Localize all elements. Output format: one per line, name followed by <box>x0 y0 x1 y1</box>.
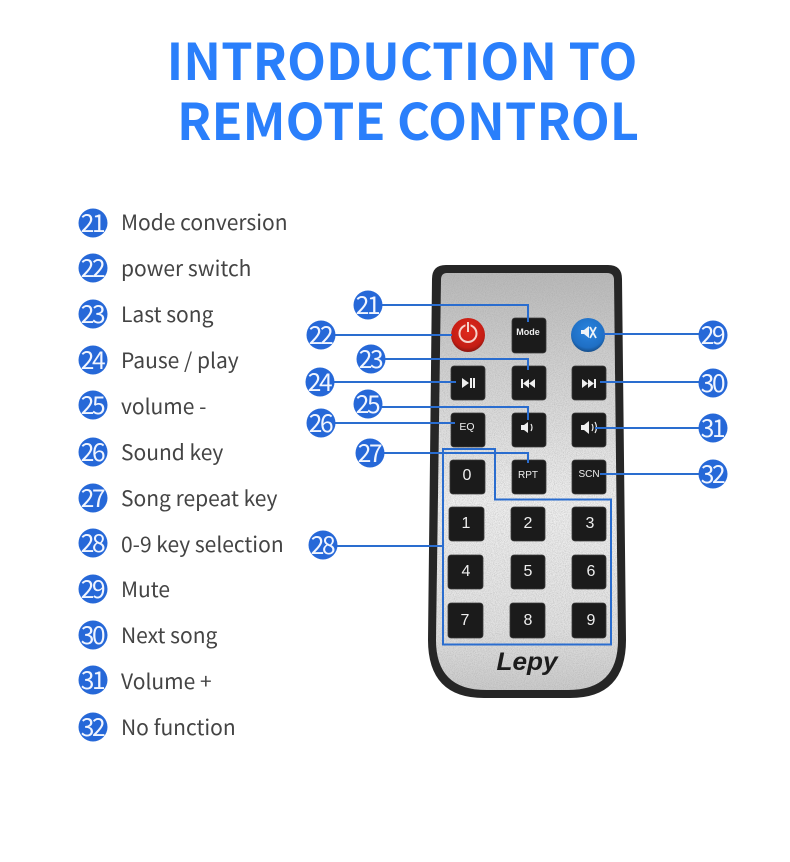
legend item 21: 21 <box>81 205 104 240</box>
callout 26: 26 <box>309 405 333 440</box>
RPT button <box>512 460 546 494</box>
callout 27: 27 <box>358 435 382 470</box>
legend item 31 <box>78 662 212 697</box>
legend item 27: 27 <box>81 480 105 515</box>
callout 31: 31 <box>701 410 724 445</box>
SCN button <box>572 460 606 494</box>
legend item 26: Sound key <box>121 437 223 467</box>
callout 25: 25 <box>356 386 380 421</box>
callout 21: 21 <box>356 287 379 322</box>
key 0: 0 <box>463 467 472 484</box>
remote control <box>428 265 626 698</box>
callout 23 <box>356 341 528 376</box>
key 9 <box>572 603 606 638</box>
callout 30 <box>600 365 728 400</box>
legend item 29: 29 <box>81 571 105 606</box>
legend item 29: Mute <box>121 574 170 604</box>
next button <box>572 366 606 400</box>
legend item 27: Song repeat key <box>121 483 278 513</box>
legend item 24 <box>78 342 239 377</box>
EQ button <box>451 413 485 447</box>
legend item 23: 23 <box>81 296 105 331</box>
remote body <box>428 265 626 698</box>
legend item 29 <box>78 571 170 606</box>
legend item 28: 28 <box>81 525 105 560</box>
Lepy logo: Lepy <box>496 648 559 676</box>
key 6: 6 <box>587 563 596 580</box>
callout 29: 29 <box>701 317 725 352</box>
silver grain texture <box>436 273 618 690</box>
callout 25 <box>354 386 528 421</box>
legend item 25: volume - <box>121 391 206 421</box>
key 9: 9 <box>587 612 596 629</box>
key 6 <box>572 555 606 589</box>
legend item 30 <box>78 617 218 652</box>
legend item 28 <box>78 525 284 560</box>
callout 22 <box>306 317 452 352</box>
title: INTRODUCTION TO <box>167 21 637 95</box>
key 3: 3 <box>586 515 595 532</box>
legend item 21: Mode conversion <box>121 207 288 237</box>
legend item 21 <box>78 205 288 240</box>
key 5: 5 <box>524 563 533 580</box>
legend item 30: Next song <box>121 620 218 650</box>
callout 28 with number key bracket: 28 <box>311 527 335 562</box>
callout 32 <box>600 456 728 491</box>
callout 31 <box>595 410 728 445</box>
legend item 28: 0-9 key selection <box>121 529 284 559</box>
key 7 <box>448 603 483 638</box>
key 2: 2 <box>524 515 533 532</box>
key 5 <box>511 555 545 589</box>
key 8 <box>510 603 545 638</box>
callout 32: 32 <box>701 456 725 491</box>
mode button: Mode <box>516 327 540 337</box>
callout 28 with number key bracket <box>308 449 611 644</box>
key 4 <box>448 555 483 589</box>
legend item 23 <box>78 296 214 331</box>
callout 29 <box>603 317 728 352</box>
callout 21 <box>354 287 528 322</box>
legend item 32: 32 <box>81 709 105 744</box>
legend item 22: power switch <box>121 253 251 283</box>
legend item 32 <box>78 709 236 744</box>
silver face plate <box>436 273 618 690</box>
legend item 31: Volume + <box>121 666 212 696</box>
legend item 26 <box>78 434 223 469</box>
legend item 23: Last song <box>121 299 214 329</box>
legend item 31: 31 <box>81 662 104 697</box>
EQ button: EQ <box>459 421 475 433</box>
key 0 <box>450 460 485 494</box>
callout 27 <box>356 435 528 470</box>
title <box>167 21 639 155</box>
callout 22: 22 <box>309 317 333 352</box>
key 2 <box>511 507 545 541</box>
RPT button: RPT <box>518 470 538 481</box>
callout 30: 30 <box>701 365 725 400</box>
power button <box>451 318 485 352</box>
callout 26 <box>306 405 455 440</box>
key 3 <box>572 507 606 541</box>
title: REMOTE CONTROL <box>177 81 639 155</box>
legend item 22 <box>78 250 251 285</box>
volume up button <box>572 413 606 447</box>
key 7: 7 <box>461 612 470 629</box>
callout 24 <box>306 364 456 399</box>
play pause button <box>451 366 485 400</box>
legend item 25: 25 <box>81 387 105 422</box>
callout 23: 23 <box>359 341 383 376</box>
key 4: 4 <box>462 563 471 580</box>
callout 24: 24 <box>308 364 332 399</box>
previous button <box>512 366 546 400</box>
mode button <box>512 318 546 353</box>
legend item 24: 24 <box>81 342 105 377</box>
legend item 32: No function <box>121 712 236 742</box>
legend item 26: 26 <box>81 434 105 469</box>
mute button <box>571 318 605 352</box>
legend list <box>78 205 288 744</box>
legend item 30: 30 <box>81 617 105 652</box>
key 1: 1 <box>462 515 471 532</box>
key 8: 8 <box>524 612 533 629</box>
legend item 25 <box>78 387 206 422</box>
legend item 27 <box>78 480 278 515</box>
legend item 24: Pause / play <box>121 345 239 375</box>
volume down button <box>512 413 546 447</box>
key 1 <box>449 507 484 541</box>
legend item 22: 22 <box>81 250 105 285</box>
SCN button: SCN <box>578 469 600 480</box>
